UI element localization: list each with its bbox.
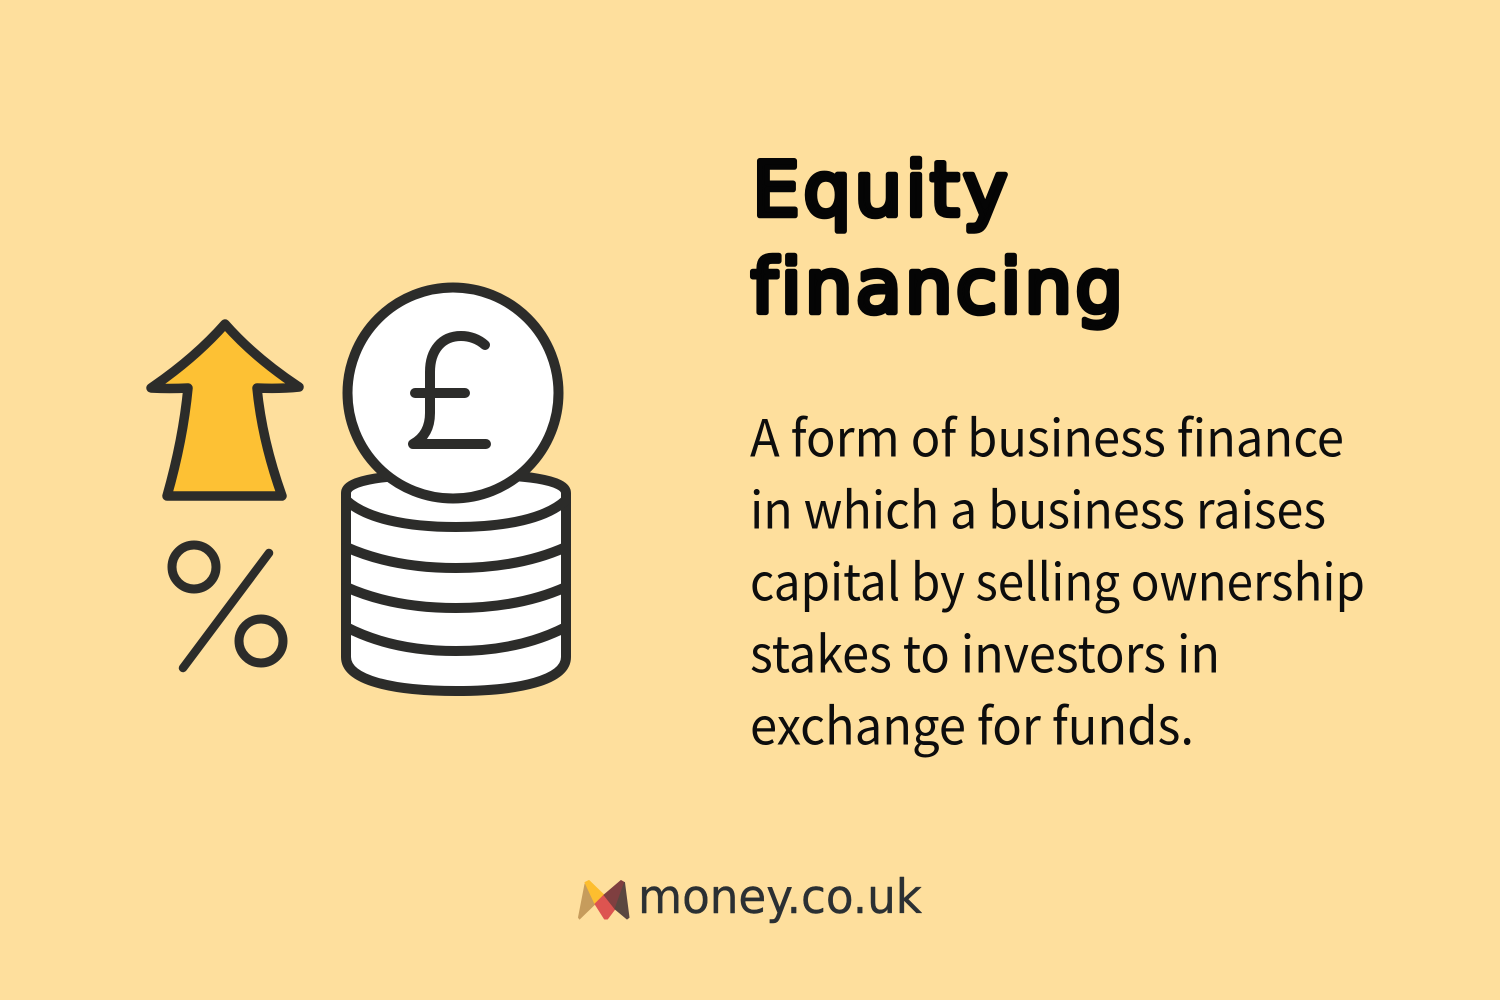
logo mark — [578, 880, 629, 919]
icon: pound coin — [348, 288, 558, 498]
body text: exchange for funds. — [750, 686, 1194, 760]
logo wordmark: money.co.uk — [638, 870, 923, 925]
icon: stack of coins — [346, 474, 566, 691]
body text — [750, 398, 1365, 760]
title — [751, 146, 1123, 330]
body text: stakes to investors in — [750, 614, 1220, 688]
body text: A form of business finance — [750, 398, 1344, 472]
title: financing — [751, 242, 1123, 330]
logo: money.co.uk — [578, 870, 923, 925]
icon: upward arrow — [151, 324, 299, 496]
icon: percent sign — [172, 545, 283, 668]
body text: in which a business raises — [750, 470, 1326, 544]
title: Equity — [752, 146, 1007, 234]
body text: capital by selling ownership — [750, 542, 1365, 616]
